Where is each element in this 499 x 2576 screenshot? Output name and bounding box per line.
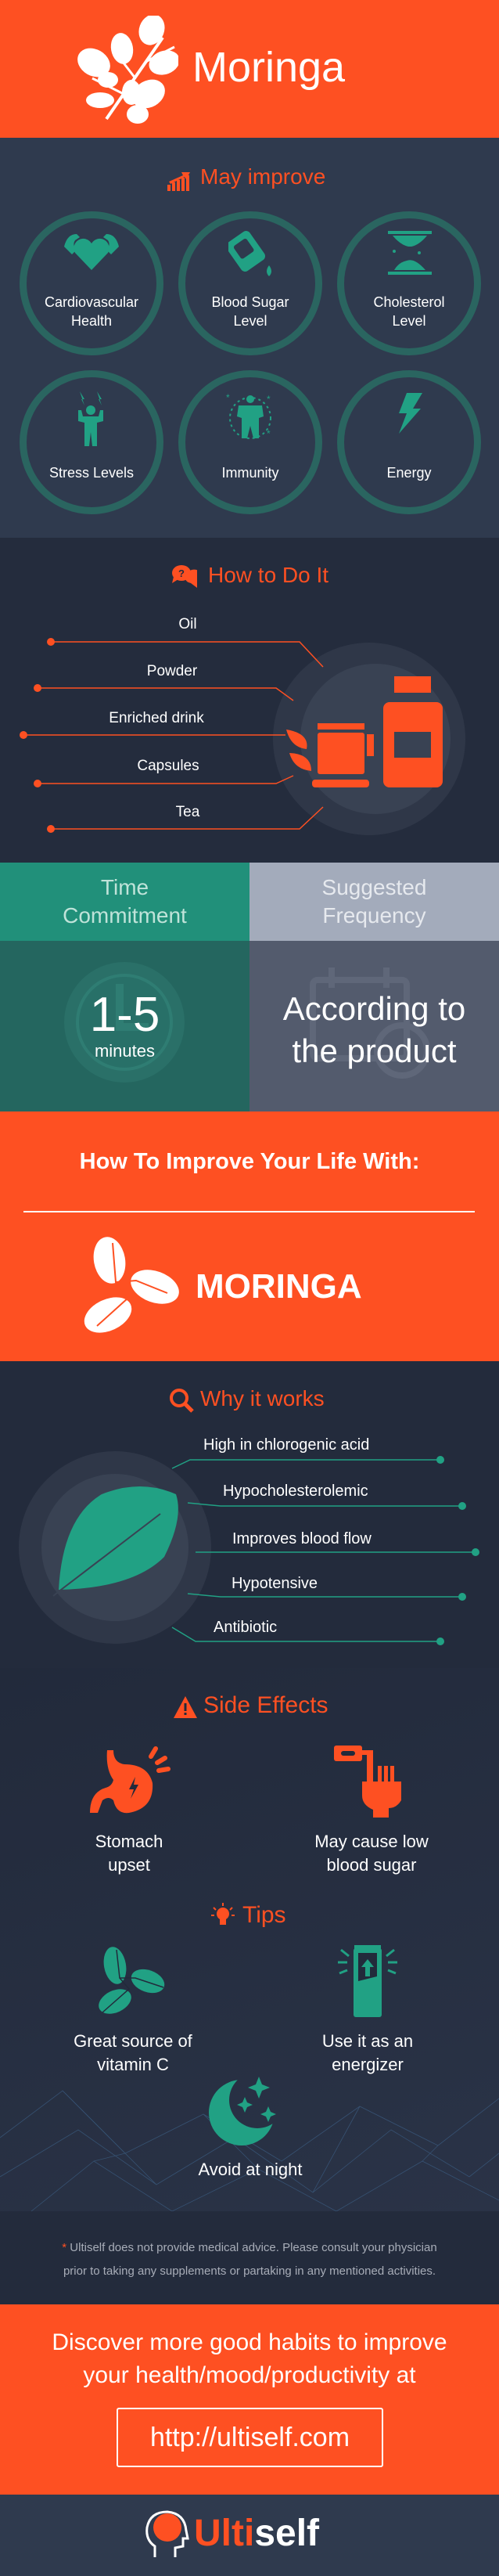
heading: may improve: May improve xyxy=(200,164,325,189)
disclaimer: * Ultiself does not provide medical advice. Please consult your physician xyxy=(62,2241,437,2254)
icon: finger prick xyxy=(334,1746,401,1818)
panel: how to do it xyxy=(0,538,499,863)
logo: ultiself: Ultiself xyxy=(194,2513,319,2554)
item: low blood sugar: May cause low xyxy=(314,1832,429,1851)
list: methods: Powder xyxy=(147,663,197,679)
list: methods: Oil xyxy=(178,616,197,632)
item: stomach upset xyxy=(90,1746,171,1875)
circle: cardiovascular xyxy=(20,211,163,355)
panel: may improve xyxy=(0,138,499,538)
diagram: leaf with lines xyxy=(19,1451,479,1645)
list: methods: Capsules xyxy=(137,758,199,774)
icon: stomach xyxy=(90,1746,171,1813)
icon: battery xyxy=(338,1945,397,2017)
list: methods: Tea xyxy=(176,804,199,820)
list: reasons xyxy=(203,1436,372,1636)
icon: brain head xyxy=(145,2511,189,2557)
disclaimer: prior to taking any supplements or partaking in any mentioned activities. xyxy=(63,2264,436,2278)
heading: why it works: Why it works xyxy=(200,1386,325,1410)
icon: leaves xyxy=(99,1947,164,2014)
item: energizer: Use it as an xyxy=(322,2031,413,2051)
circle: blood sugar: Blood Sugar xyxy=(211,294,289,310)
icon: moon and stars xyxy=(209,2077,276,2145)
heading: How To Improve Your Life With: xyxy=(80,1149,419,1174)
heading: tips: Tips xyxy=(242,1902,286,1928)
circle: stress xyxy=(20,370,163,514)
item: low blood sugar xyxy=(314,1746,429,1875)
circle: immunity: Immunity xyxy=(221,465,278,481)
icon: hourglass xyxy=(388,231,432,275)
icon: heart with arms xyxy=(64,234,119,270)
icon: stressed person xyxy=(78,391,103,446)
text: discover more xyxy=(52,2329,447,2388)
circle: blood sugar xyxy=(178,211,322,355)
disclaimer xyxy=(0,2211,499,2304)
circle: energy: Energy xyxy=(386,465,432,481)
title: Moringa xyxy=(192,44,345,91)
item: vitamin C: vitamin C xyxy=(97,2055,169,2074)
footer xyxy=(0,2495,499,2576)
icon: speech bubbles: ? xyxy=(178,567,185,579)
header: time commitment xyxy=(0,863,250,941)
panel: time commitment xyxy=(0,863,250,1111)
button: url xyxy=(117,2408,383,2467)
text: discover more: your health/mood/productivity at xyxy=(83,2362,416,2388)
list: reasons: Hypocholesterolemic xyxy=(223,1483,368,1500)
circle: cholesterol xyxy=(337,211,481,355)
panel: side effects and tips xyxy=(0,1668,499,2211)
icon: clock background xyxy=(64,962,185,1083)
item: energizer xyxy=(322,1945,413,2074)
icon: warning xyxy=(174,1696,197,1718)
icon: magnifier xyxy=(170,1389,194,1413)
item: energizer: energizer xyxy=(332,2055,404,2074)
call to action xyxy=(0,2304,499,2495)
icon: moringa branch xyxy=(77,16,178,124)
circle: immunity xyxy=(178,370,322,514)
circle: energy xyxy=(337,370,481,514)
item: low blood sugar: blood sugar xyxy=(327,1855,416,1875)
network background xyxy=(0,2090,499,2211)
icon: rising chart xyxy=(167,172,190,191)
item: avoid at night: Avoid at night xyxy=(199,2160,302,2179)
item: vitamin C: Great source of xyxy=(74,2031,192,2051)
heading: side effects: Side Effects xyxy=(203,1692,328,1718)
icon: shielded person: * xyxy=(267,394,271,405)
circle: stress: Stress Levels xyxy=(49,465,134,481)
diagram: circle with products xyxy=(20,638,465,835)
value: 1-5 minutes: 1-5 xyxy=(90,988,160,1042)
button: url: http://ultiself.com xyxy=(150,2423,350,2452)
item: stomach upset: Stomach xyxy=(95,1832,163,1851)
list: reasons: Hypotensive xyxy=(232,1575,318,1592)
item: stomach upset: upset xyxy=(108,1855,150,1875)
icon: glucose meter xyxy=(228,231,271,276)
circle: cholesterol: Cholesterol xyxy=(373,294,445,310)
header: suggested frequency: Frequency xyxy=(322,903,426,928)
logo: ultiself xyxy=(145,2511,319,2557)
header: suggested frequency: Suggested xyxy=(322,875,426,899)
list: methods xyxy=(109,616,204,820)
header: time commitment: Commitment xyxy=(63,903,187,928)
icon: lightning xyxy=(399,393,422,434)
circle: cardiovascular: Health xyxy=(71,313,112,329)
benefit circles xyxy=(20,211,481,514)
header: time commitment: Time xyxy=(101,875,149,899)
title: MORINGA: MORINGA xyxy=(196,1267,362,1306)
value: according to the product xyxy=(283,990,465,1069)
list: reasons: Antibiotic xyxy=(214,1619,277,1636)
value: according to the product: According to xyxy=(283,990,465,1027)
header: suggested frequency xyxy=(250,863,499,941)
text: discover more: Discover more good habits to improve xyxy=(52,2329,447,2355)
icon: calendar background xyxy=(310,967,430,1079)
icon: shielded person: * xyxy=(267,428,271,439)
header banner xyxy=(0,0,499,138)
list: methods: Enriched drink xyxy=(109,710,204,726)
circle: cardiovascular: Cardiovascular xyxy=(45,294,138,310)
item: avoid at night xyxy=(199,2077,302,2179)
panel: why it works xyxy=(0,1361,499,1668)
panel: time commitment: minutes xyxy=(95,1041,155,1061)
icon: speech bubbles xyxy=(172,565,197,588)
value: according to the product: the product xyxy=(292,1032,457,1069)
icon: shielded person xyxy=(226,393,271,439)
circle: blood sugar: Level xyxy=(233,313,267,329)
panel: suggested frequency xyxy=(250,863,499,1111)
circle: cholesterol: Level xyxy=(392,313,426,329)
list: reasons: Improves blood flow xyxy=(232,1530,372,1547)
panel: how to improve banner xyxy=(0,1111,499,1361)
heading: tips xyxy=(211,1902,286,1928)
list: reasons: High in chlorogenic acid xyxy=(203,1436,369,1454)
heading: how to do it: How to Do It xyxy=(208,563,328,587)
icon: light bulb xyxy=(211,1903,235,1925)
item: vitamin C xyxy=(74,1947,192,2074)
icon: three leaves xyxy=(84,1237,179,1333)
